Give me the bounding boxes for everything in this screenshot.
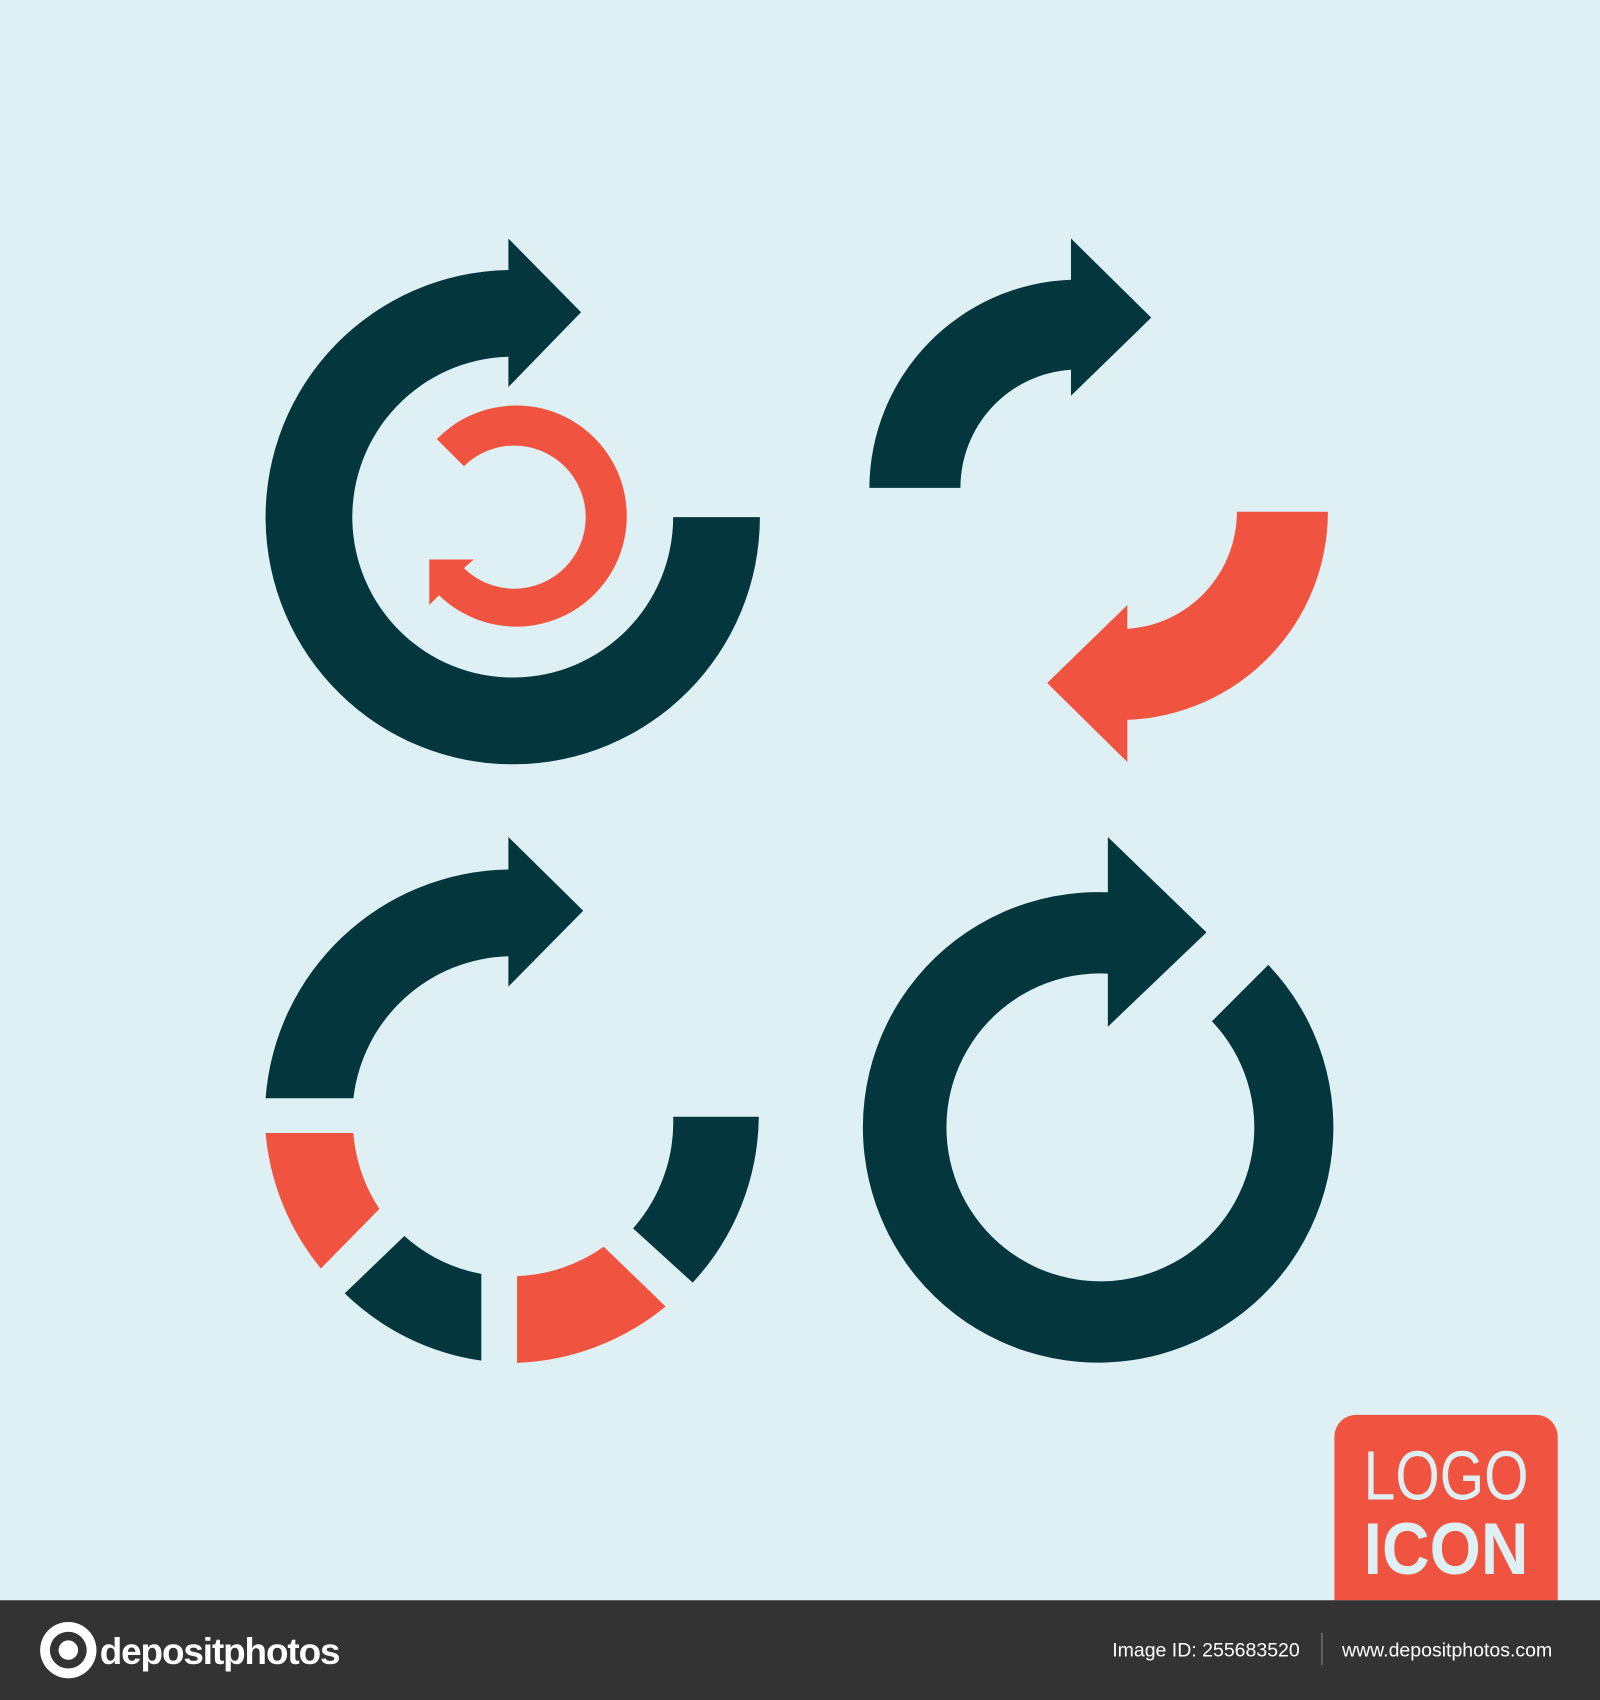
icon: big ring arrow with small red refresh arrow bbox=[266, 239, 760, 764]
footer logo: depositphotos bbox=[40, 1622, 339, 1678]
footer bar bbox=[0, 1600, 1600, 1700]
footer: website: www.depositphotos.com bbox=[1341, 1640, 1552, 1662]
footer: image id: Image ID: 255683520 bbox=[1112, 1640, 1300, 1662]
logo badge: LOGO ICON: ICON bbox=[1364, 1507, 1528, 1590]
icon: full circle refresh arrow bbox=[863, 837, 1333, 1363]
logo badge: LOGO ICON bbox=[1334, 1415, 1558, 1600]
icon: segmented circular arrow bbox=[266, 837, 759, 1363]
logo badge: LOGO ICON: LOGO bbox=[1364, 1436, 1528, 1514]
icon: pair of curved arrows (dark and red) bbox=[869, 239, 1328, 762]
footer logo: depositphotos: depositphotos bbox=[100, 1631, 339, 1672]
